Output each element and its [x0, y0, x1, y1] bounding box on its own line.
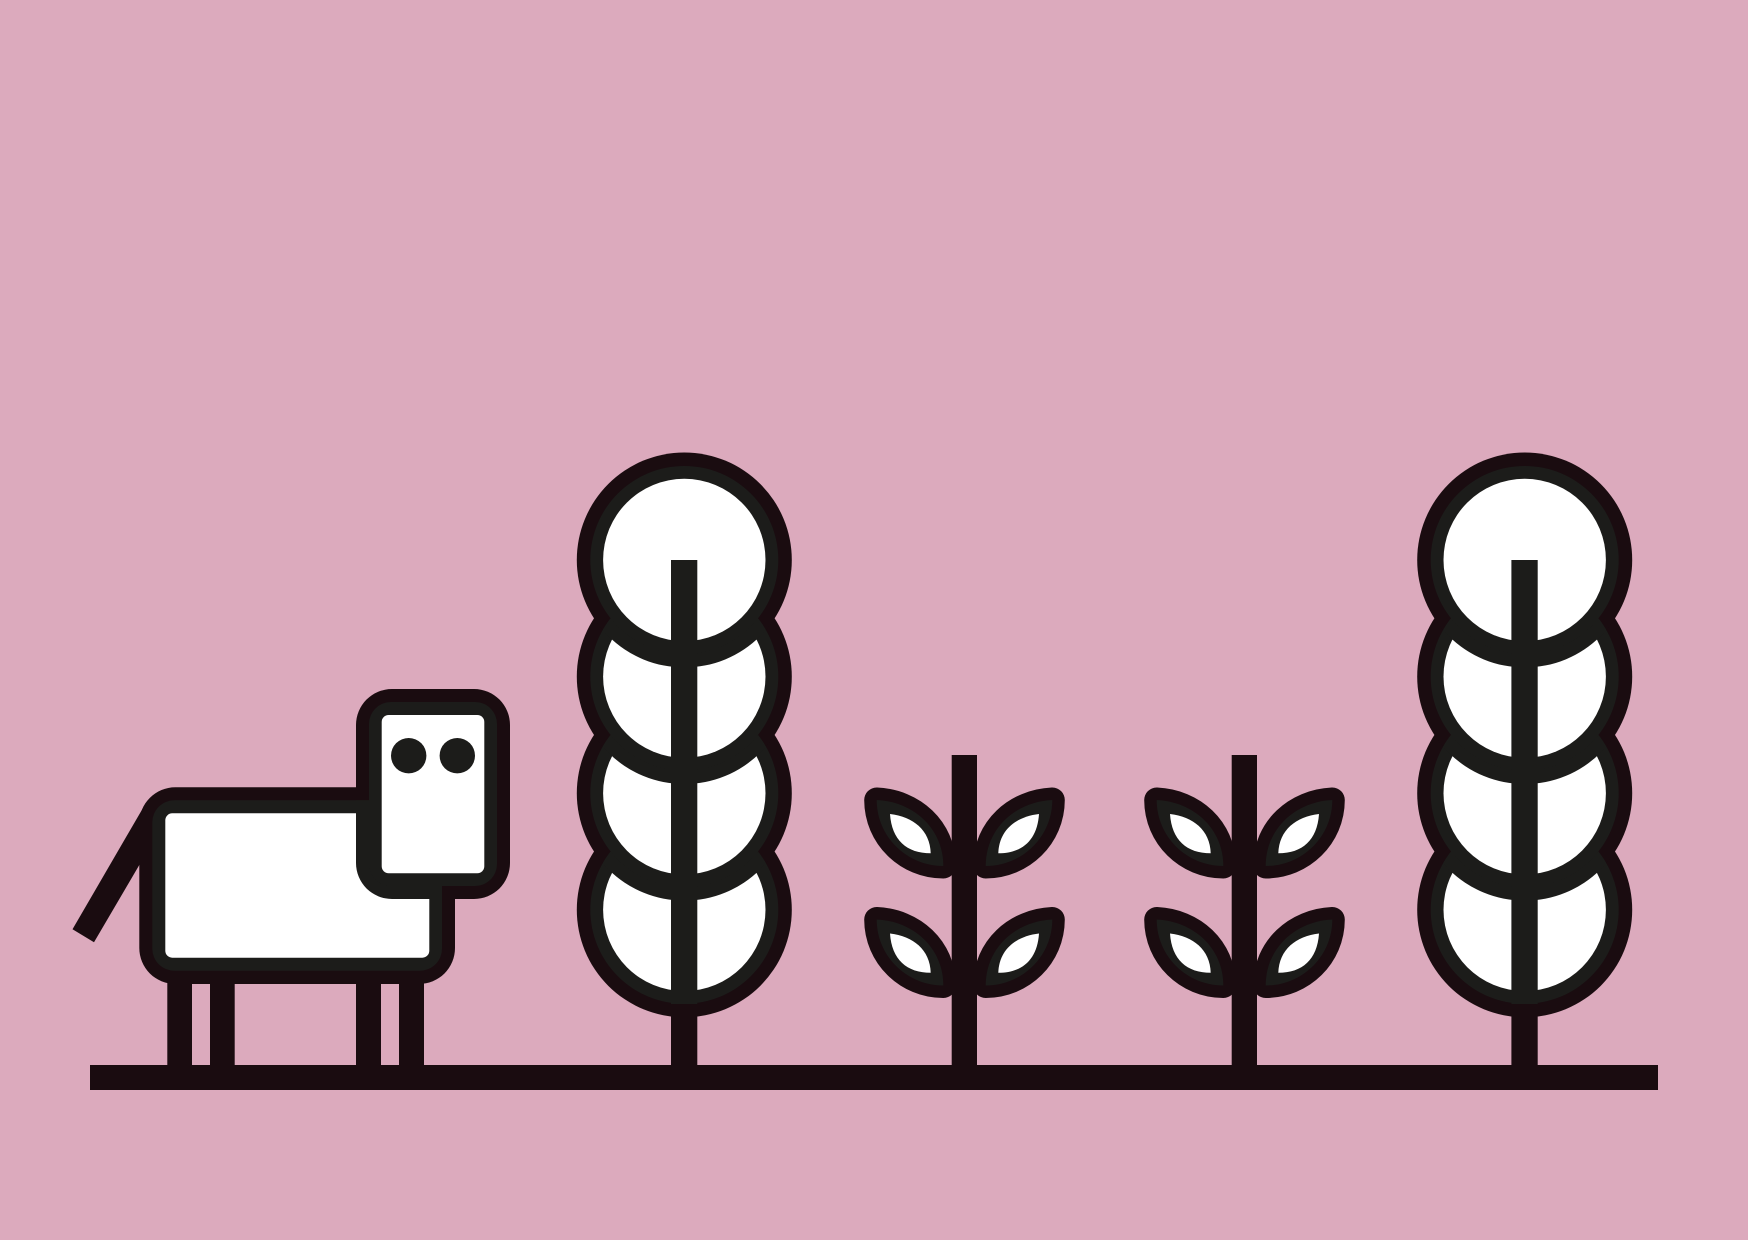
tree left: [577, 452, 792, 1070]
tree right: [1417, 452, 1632, 1070]
sheep eyes: [391, 738, 475, 773]
ground line: [90, 1065, 1658, 1090]
sheep head: [356, 702, 497, 899]
illustration: sheep, trees and plants on pink background: [72, 452, 1658, 1090]
sheep tail: [72, 808, 160, 942]
sheep legs: [167, 975, 424, 1070]
sheep: [72, 689, 510, 1070]
plant right: [1157, 755, 1332, 1070]
sheep head outline: [356, 689, 510, 899]
plant left: [877, 755, 1052, 1070]
sheep body: [139, 787, 455, 984]
